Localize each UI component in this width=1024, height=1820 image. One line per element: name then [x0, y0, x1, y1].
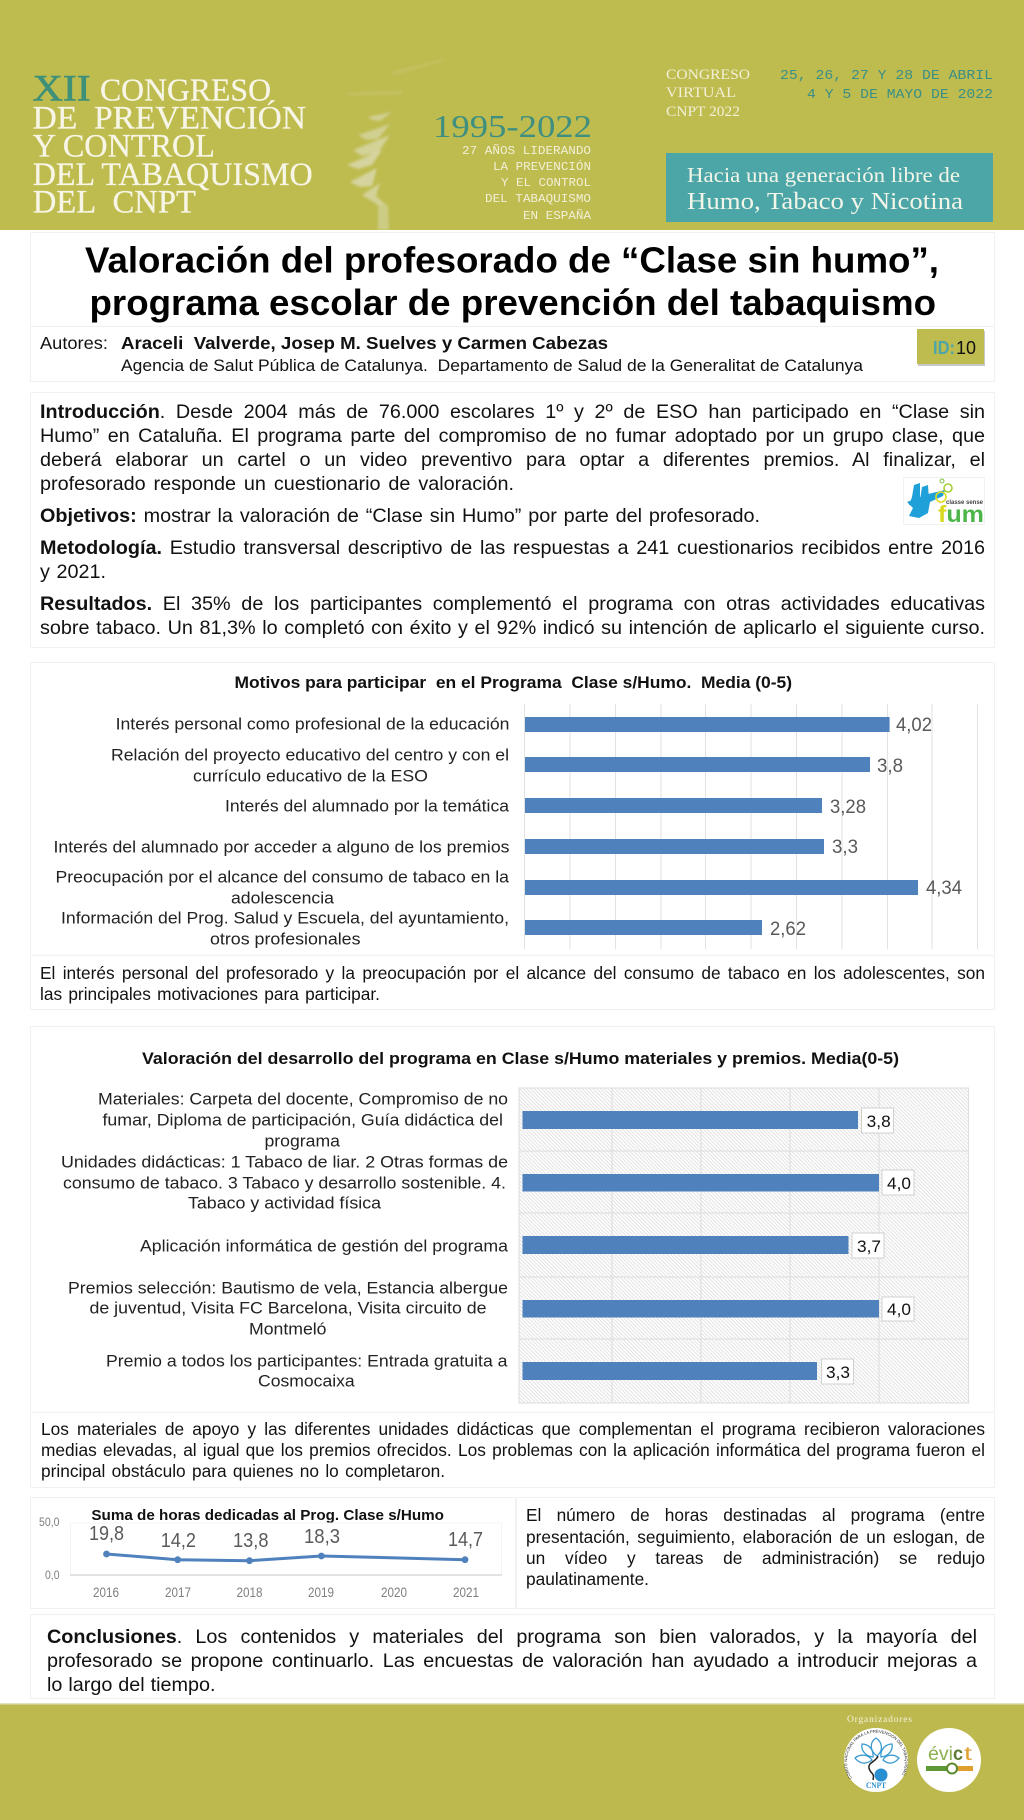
row: preocupación	[56, 868, 962, 908]
year labels: 2019	[308, 1585, 334, 1600]
row: preocupación: adolescencia	[231, 889, 335, 908]
row: materiales: fumar, Diploma de participación, Guía didáctica del	[102, 1111, 503, 1130]
value labels: 18,3	[304, 1526, 340, 1548]
icon: classe sense fum logo: classe sense	[946, 500, 984, 506]
anniversary slogan: Y EL CONTROL	[501, 176, 591, 190]
chart title: Valoración del desarrollo del programa en Clase s/Humo materiales y premios. Media(0-5)	[142, 1050, 899, 1068]
year labels: 2017	[165, 1585, 191, 1600]
line chart	[39, 1515, 502, 1600]
congress name: XII	[33, 69, 91, 110]
icon: CNPT logo: COMITÉ NACIONAL PARA LA PREVENCIÓN DEL TABAQUISMO	[844, 1730, 908, 1779]
value labels: 14,2	[161, 1530, 196, 1552]
row: aplicación informática: 3,7	[857, 1237, 881, 1256]
ID badge: ID:	[933, 338, 955, 358]
panel: hours text	[517, 1498, 994, 1608]
row: proyecto educativo: 3,8	[877, 756, 903, 777]
text: introduction: deberá elaborar un cartel o un video preventivo para optar a diferentes premios. Al finalizar, el	[40, 449, 985, 471]
row: materiales: programa	[264, 1132, 341, 1151]
footer banner	[0, 1703, 1024, 1820]
panel: title	[31, 233, 994, 327]
row: premios selección	[68, 1279, 914, 1339]
row: información: otros profesionales	[210, 930, 360, 949]
row: premio a todos	[106, 1352, 854, 1391]
row: premios selección: 4,0	[887, 1300, 911, 1319]
text: methodology: y 2021.	[40, 561, 106, 583]
text: methodology	[40, 537, 985, 583]
panel: conclusions: lo largo del tiempo.	[47, 1674, 216, 1696]
panel: chart motivos takeaway: El interés personal del profesorado y la preocupación por el alcance del consumo de tabaco en los adolescentes, son	[40, 963, 985, 983]
heading	[85, 240, 939, 323]
icon: evict logo: évi	[928, 1744, 953, 1765]
icon: evict logo	[917, 1728, 981, 1792]
row: premios selección: Montmeló	[249, 1320, 326, 1339]
icon: CNPT logo: CNPT	[866, 1781, 887, 1790]
anniversary slogan: DEL TABAQUISMO	[485, 192, 591, 206]
panel: authors	[31, 327, 994, 381]
panel: introduction, objectives, methodology, results	[31, 393, 994, 647]
anniversary slogan	[462, 143, 592, 223]
panel: chart valoración takeaway	[31, 1413, 994, 1487]
row: premios: Interés del alumnado por acceder a alguno de los premios	[54, 838, 510, 857]
congress name: DEL TABAQUISMO	[33, 157, 313, 193]
row: materiales: Materiales: Carpeta del docente, Compromiso de no	[98, 1090, 508, 1109]
chart title: Suma de horas dedicadas al Prog. Clase s/Humo	[91, 1507, 444, 1524]
icon: smoke wisp	[345, 58, 447, 230]
row: interés personal: Interés personal como profesional de la educación	[116, 715, 509, 734]
anniversary slogan: EN ESPAÑA	[523, 208, 592, 223]
text: objectives: Objetivos: mostrar la valoración de “Clase sin Humo” por parte del profesorado.	[40, 505, 760, 527]
value labels: 19,8	[89, 1523, 124, 1545]
value labels: 13,8	[233, 1530, 268, 1552]
heading: Valoración del profesorado de “Clase sin humo”,	[85, 240, 939, 280]
row: interés personal: 4,02	[896, 715, 932, 736]
year labels	[93, 1585, 479, 1600]
authors line: Araceli Valverde, Josep M. Suelves y Carmen Cabezas	[121, 333, 608, 353]
congress name: CONGRESO	[100, 73, 271, 108]
row: interés temática: Interés del alumnado por la temática	[225, 797, 510, 816]
row: unidades didácticas: 4,0	[887, 1174, 911, 1193]
header banner	[0, 0, 1024, 230]
authors line: Autores:	[40, 333, 108, 353]
row: aplicación informática	[140, 1233, 884, 1258]
row: interés temática	[225, 797, 866, 818]
row: interés temática: 3,28	[830, 797, 866, 818]
row: premio a todos: 3,3	[826, 1363, 850, 1382]
organizers label: Organizadores	[847, 1715, 912, 1725]
text: introduction: Humo” en Cataluña. El programa parte del compromiso de no fumar adoptado por un grupo clase, que	[40, 425, 985, 447]
virtual congress label: CONGRESO	[666, 67, 750, 83]
row: información	[61, 909, 806, 949]
row: información: 2,62	[770, 919, 806, 940]
hours series	[103, 1551, 468, 1564]
icon: evict logo: c	[953, 1744, 963, 1765]
congress dates	[780, 68, 993, 103]
virtual congress label: VIRTUAL	[666, 85, 736, 101]
ID badge	[917, 329, 985, 366]
congress dates: 25, 26, 27 Y 28 DE ABRIL	[780, 68, 993, 84]
panel: conclusions	[31, 1615, 994, 1698]
slogan box: Humo, Tabaco y Nicotina	[687, 189, 963, 215]
y axis labels	[39, 1515, 60, 1582]
ID badge: 10	[956, 338, 976, 358]
congress name	[33, 69, 313, 221]
panel: hours text: paulatinamente.	[526, 1569, 649, 1589]
icon: evict logo: t	[964, 1744, 973, 1765]
text: introduction: profesorado responde un cuestionario de valoración.	[40, 473, 514, 495]
panel: chart valoración takeaway: principal obstáculo para quienes no lo completaron.	[41, 1461, 445, 1481]
panel: chart valoración takeaway: medias elevadas, al igual que los premios ofrecidos. Los problemas con la aplicación informática del programa fueron el	[41, 1440, 985, 1460]
text: introduction: Introducción. Desde 2004 más de 76.000 escolares 1º y 2º de ESO han participado en “Clase sin	[40, 401, 985, 423]
row: premio a todos: Premio a todos los participantes: Entrada gratuita a	[106, 1352, 508, 1371]
anniversary years: 1995-2022	[433, 108, 592, 144]
year labels: 2020	[381, 1585, 407, 1600]
panel: chart valoración takeaway: Los materiales de apoyo y las diferentes unidades didácticas que complementan el programa recibieron valoraciones	[41, 1419, 985, 1439]
bar chart: valoración	[61, 1088, 969, 1403]
congress dates: 4 Y 5 DE MAYO DE 2022	[807, 87, 993, 103]
row: unidades didácticas: consumo de tabaco. 3 Tabaco y desarrollo sostenible. 4.	[63, 1174, 506, 1193]
anniversary slogan: LA PREVENCIÓN	[493, 159, 591, 174]
row: premios	[54, 837, 858, 858]
row: interés personal	[116, 715, 932, 736]
panel: hours text: un vídeo y tareas de administración) se redujo	[526, 1548, 985, 1568]
text: introduction	[40, 401, 985, 495]
slogan box: Hacia una generación libre de	[687, 163, 960, 187]
row: premios: 3,3	[832, 837, 858, 858]
row: aplicación informática: Aplicación informática de gestión del programa	[140, 1237, 509, 1256]
row: preocupación: 4,34	[926, 878, 962, 899]
text: results	[40, 593, 985, 639]
y axis labels: 0,0	[45, 1568, 60, 1582]
panel: hours text: El número de horas destinadas al programa (entre	[526, 1505, 985, 1525]
row: proyecto educativo: currículo educativo de la ESO	[193, 767, 428, 786]
panel: conclusions: profesorado se propone continuarlo. Las encuestas de valoración han ayudado a introducir mejoras a	[47, 1650, 977, 1672]
panel: conclusions: Conclusiones. Los contenidos y materiales del programa son bien valorados, y la mayoría del	[47, 1626, 977, 1648]
panel: chart valoración	[31, 1027, 994, 1413]
year labels: 2016	[93, 1585, 119, 1600]
virtual congress label	[666, 67, 750, 120]
heading: programa escolar de prevención del tabaquismo	[90, 282, 936, 323]
row: premios selección: de juventud, Visita FC Barcelona, Visita circuito de	[90, 1299, 486, 1318]
y axis labels: 50,0	[39, 1515, 60, 1529]
row: unidades didácticas: Unidades didácticas: 1 Tabaco de liar. 2 Otras formas de	[61, 1153, 508, 1172]
value labels	[89, 1523, 483, 1552]
text: methodology: Metodología. Estudio transversal descriptivo de las respuestas a 241 cuestionarios recibidos entre 2016	[40, 537, 985, 559]
panel: chart motivos takeaway: las principales motivaciones para participar.	[40, 984, 380, 1004]
row: materiales	[98, 1090, 894, 1151]
slogan box	[666, 153, 993, 222]
icon: classe sense fum logo	[903, 477, 985, 525]
panel: chart motivos	[31, 663, 994, 956]
congress name: Y CONTROL	[33, 129, 215, 165]
affiliation: Agencia de Salut Pública de Catalunya. Departamento de Salud de la Generalitat de Catalunya	[121, 357, 864, 375]
panel: hours text: presentación, seguimiento, elaboración de un eslogan, de	[526, 1527, 985, 1547]
virtual congress label: CNPT 2022	[666, 104, 740, 120]
congress name: DEL CNPT	[33, 185, 196, 221]
congress name: DE PREVENCIÓN	[33, 98, 306, 136]
row: unidades didácticas	[61, 1153, 914, 1213]
text: results: Resultados. El 35% de los participantes complementó el programa con otras actividades educativas	[40, 593, 985, 615]
row: preocupación: Preocupación por el alcance del consumo de tabaco en la	[56, 868, 510, 887]
panel: hours line chart	[31, 1498, 515, 1608]
panel: chart motivos takeaway	[31, 956, 994, 1009]
row: materiales: 3,8	[867, 1112, 891, 1131]
row: unidades didácticas: Tabaco y actividad física	[188, 1194, 382, 1213]
chart title: Motivos para participar en el Programa Clase s/Humo. Media (0-5)	[234, 674, 792, 692]
year labels: 2021	[453, 1585, 479, 1600]
year labels: 2018	[236, 1585, 262, 1600]
text: results: sobre tabaco. Un 81,3% lo completó con éxito y el 92% indicó su intención de aplicarlo el siguiente curso.	[40, 617, 985, 639]
row: proyecto educativo: Relación del proyecto educativo del centro y con el	[111, 746, 509, 765]
row: premio a todos: Cosmocaixa	[258, 1372, 355, 1391]
bar chart: motivos	[54, 704, 978, 949]
row: proyecto educativo	[111, 746, 903, 786]
row: premios selección: Premios selección: Bautismo de vela, Estancia albergue	[68, 1279, 508, 1298]
value labels: 14,7	[448, 1529, 483, 1551]
anniversary slogan: 27 AÑOS LIDERANDO	[462, 143, 591, 158]
row: información: Información del Prog. Salud y Escuela, del ayuntamiento,	[61, 909, 509, 928]
